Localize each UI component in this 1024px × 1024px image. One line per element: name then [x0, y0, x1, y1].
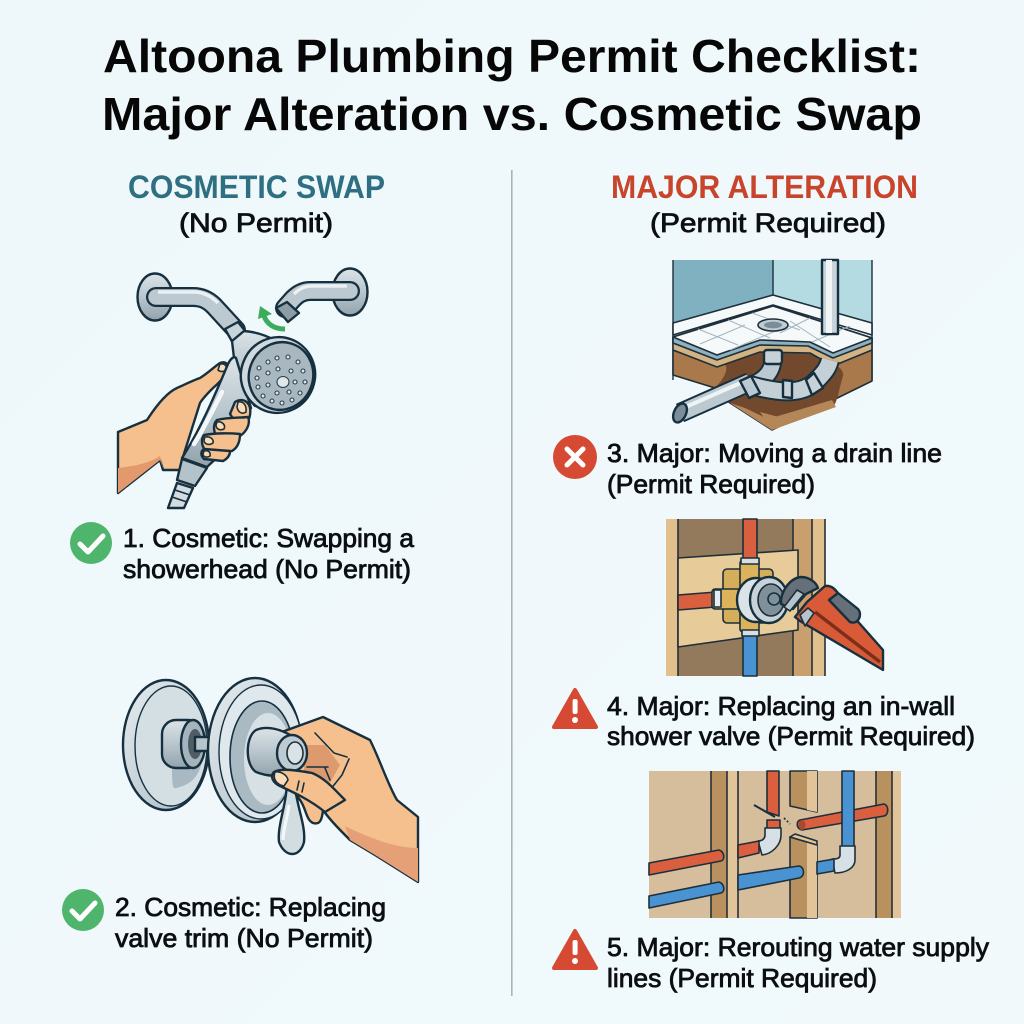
item 1: swapping a showerhead: showerhead (No Permit) [123, 554, 411, 584]
illustration: moving a drain line [670, 260, 872, 430]
icon: warning triangle [554, 931, 596, 968]
lever [279, 780, 304, 854]
item 3: moving a drain line: 3. Major: Moving a drain line [607, 438, 942, 468]
panel: major alteration [553, 169, 989, 993]
heading: cosmetic swap: (No Permit) [179, 208, 333, 238]
icon: green check [70, 522, 112, 564]
item 5: rerouting water supply lines [554, 931, 989, 993]
floor slab [673, 306, 872, 367]
heading: major alteration: (Permit Required) [650, 208, 886, 238]
hand palm and thumb base [118, 362, 228, 493]
hand back [279, 717, 418, 882]
item 3: moving a drain line: (Permit Required) [607, 469, 815, 499]
icon: pipe wrench [781, 577, 883, 670]
item 4: replacing an in-wall shower valve: 4. Major: Replacing an in-wall [607, 691, 955, 721]
heading: major alteration: MAJOR ALTERATION [611, 169, 918, 205]
heading: cosmetic swap: COSMETIC SWAP [128, 169, 385, 205]
item 1: swapping a showerhead: 1. Cosmetic: Swapping a [123, 523, 415, 553]
title [102, 30, 922, 140]
valve knob [248, 728, 292, 776]
thumb [272, 770, 345, 812]
item 5: rerouting water supply lines: 5. Major: Rerouting water supply [607, 932, 989, 962]
panel: cosmetic swap [62, 169, 418, 953]
heading: cosmetic swap [128, 169, 385, 238]
item 4: replacing an in-wall shower valve [554, 690, 975, 751]
shower head neck [225, 322, 246, 345]
item 2: replacing valve trim: valve trim (No Permit) [115, 923, 373, 953]
handle and hose [168, 357, 251, 508]
title: Major Alteration vs. Cosmetic Swap [102, 88, 922, 140]
item 5: rerouting water supply lines: lines (Permit Required) [607, 963, 877, 993]
icon: red cross [553, 435, 597, 479]
icon: green swap arrow [258, 306, 285, 329]
drain pipe [670, 350, 830, 425]
heading: major alteration [611, 169, 918, 238]
item 1: swapping a showerhead [70, 522, 415, 584]
soil block [673, 350, 872, 430]
illustration: replacing valve trim [123, 678, 418, 882]
illustration: swapping a handheld showerhead [118, 268, 368, 508]
item 4: replacing an in-wall shower valve: shower valve (Permit Required) [607, 721, 975, 751]
cold water pipes [649, 771, 855, 908]
item 3: moving a drain line [553, 435, 942, 499]
title: Altoona Plumbing Permit Checklist: [103, 30, 921, 82]
item 2: replacing valve trim [62, 889, 386, 953]
hot water pipes [649, 771, 888, 875]
item 2: replacing valve trim: 2. Cosmetic: Replacing [115, 892, 386, 922]
illustration: rerouting water supply lines [649, 771, 901, 918]
icon: warning triangle [554, 690, 596, 727]
icon: green check [62, 889, 104, 931]
illustration: replacing an in-wall shower valve [666, 519, 883, 676]
fingers [230, 400, 250, 424]
